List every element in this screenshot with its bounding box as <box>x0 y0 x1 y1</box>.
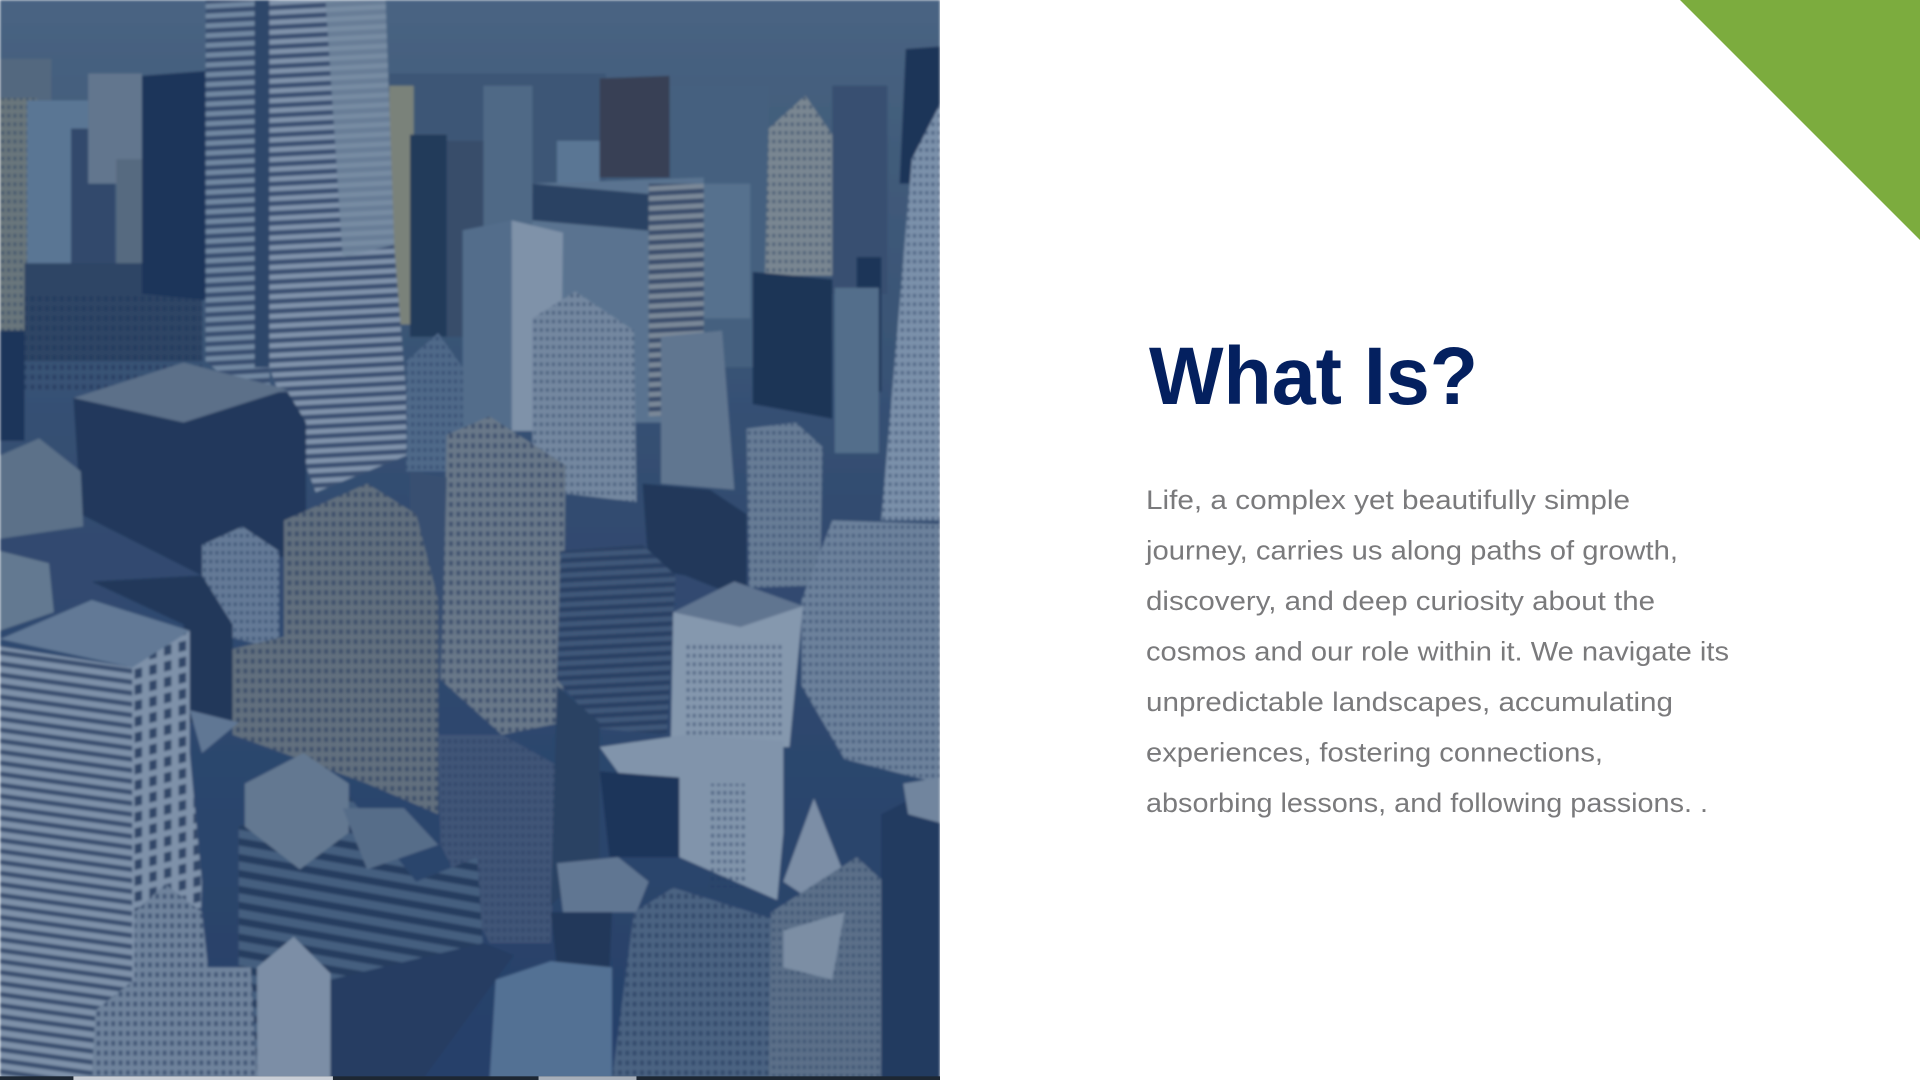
body paragraph: experiences, fostering connections, <box>1146 738 1603 768</box>
panel: city skyline photo with navy tint <box>0 0 940 1080</box>
backdrop: hazy distant city <box>0 0 940 1080</box>
bottom centre pale block <box>490 961 612 1080</box>
ornate pale building, bottom left <box>92 884 330 1080</box>
body paragraph <box>1145 485 1729 818</box>
distant towers, top middle <box>386 73 887 367</box>
body paragraph: cosmos and our role within it. We navigate its <box>1146 636 1729 666</box>
title: What Is? <box>1149 331 1478 422</box>
grey slab centre right <box>661 331 734 490</box>
dark tower, upper left <box>142 71 206 300</box>
glitch strip along bottom of photo <box>0 1076 940 1080</box>
body paragraph: unpredictable landscapes, accumulating <box>1146 687 1673 717</box>
patterned building, bottom centre <box>612 888 783 1080</box>
mid-lower dark block <box>438 686 600 943</box>
ornate pale tower <box>532 291 636 502</box>
wide striped building <box>532 178 704 422</box>
dark block bottom right <box>881 784 940 1080</box>
dark buildings, mid centre <box>557 422 822 735</box>
tan tower with crown <box>765 96 832 276</box>
rooftop bottom right edge <box>903 778 940 823</box>
lower left high-rise <box>0 600 239 1080</box>
tan building left-centre <box>233 484 438 814</box>
distant towers, upper left <box>0 59 202 392</box>
patterned building, right <box>802 520 940 784</box>
stepped striped tower <box>239 753 483 1080</box>
dome building <box>406 333 463 471</box>
corner accent: green triangle <box>1680 0 1920 240</box>
dark upper right tower <box>900 47 940 184</box>
body paragraph: absorbing lessons, and following passions. . <box>1146 788 1708 818</box>
tall striped tower <box>206 0 408 492</box>
navy tint overlay <box>0 0 940 1080</box>
dark cube building with roof <box>0 331 306 576</box>
light grey slab tower <box>463 220 563 431</box>
pale rooftops, bottom right <box>769 798 884 1080</box>
white building with rooftop <box>671 582 803 747</box>
body paragraph: Life, a complex yet beautifully simple <box>1146 485 1630 515</box>
body paragraph: discovery, and deep curiosity about the <box>1146 586 1655 616</box>
dark alley bottom centre <box>330 943 514 1080</box>
tall pale tower right edge <box>835 104 940 520</box>
brown tower top <box>600 76 670 178</box>
body paragraph: journey, carries us along paths of growth, <box>1145 536 1678 566</box>
tan building centre <box>410 416 565 735</box>
lower left small buildings <box>0 438 279 722</box>
white building with dark courtyard <box>551 735 783 967</box>
dark block right <box>753 272 832 419</box>
